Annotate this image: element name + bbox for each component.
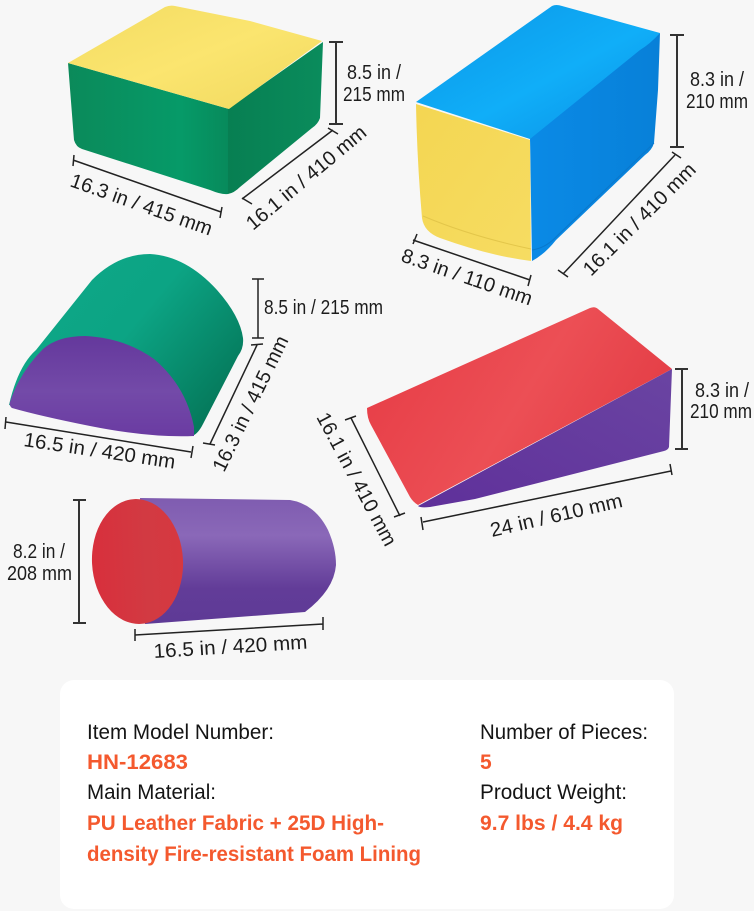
block: green sides and yellow top bbox=[68, 6, 323, 194]
dimension: 24 in / 610 mm: 24 in / 610 mm bbox=[488, 490, 625, 542]
product: purple cylinder with red end and dimensions bbox=[7, 497, 336, 663]
dimension: 16.1 in / 410 mm: 16.1 in / 410 mm bbox=[579, 159, 701, 281]
dimension: 16.3 in / 415 mm: 16.3 in / 415 mm bbox=[209, 333, 293, 475]
product: half-round green and purple bolster with dimensions bbox=[5, 254, 383, 475]
dimension: 16.5 in / 420 mm bbox=[135, 617, 323, 663]
spec: number of pieces: Number of Pieces: bbox=[480, 721, 648, 744]
dimension: 16.1 in / 410 mm: 16.1 in / 410 mm bbox=[312, 409, 400, 550]
spec: main material: Main Material: bbox=[87, 781, 216, 804]
dimension: 8.5 in / 215 mm: 215 mm bbox=[343, 84, 405, 106]
dimension: 8.5 in / 215 mm: 8.5 in / 215 mm bbox=[264, 297, 383, 319]
spec: main material: PU Leather Fabric + 25D High- bbox=[87, 812, 384, 835]
dimension: 8.2 in / 208 mm: 208 mm bbox=[7, 563, 72, 585]
product: blue and yellow rectangular block with dimensions bbox=[398, 5, 748, 310]
spec: item model number bbox=[87, 721, 274, 774]
dimension: 16.5 in / 420 mm bbox=[5, 417, 193, 474]
dimension: 8.3 in / 210 mm: 8.3 in / bbox=[695, 380, 749, 402]
dimension: 8.3 in / 110 mm: 8.3 in / 110 mm bbox=[398, 245, 535, 310]
dimension: 8.2 in / 208 mm: 8.2 in / bbox=[13, 541, 65, 563]
bolster: green curved body and purple end bbox=[9, 254, 243, 436]
product: square foam block with dimensions bbox=[67, 6, 405, 240]
block: blue sides and yellow end bbox=[416, 5, 660, 261]
dimension: 16.1 in / 410 mm: 16.1 in / 410 mm bbox=[242, 122, 371, 235]
dimension: 8.3 in / 210 mm: 8.3 in / bbox=[690, 69, 744, 91]
spec: number of pieces bbox=[480, 721, 648, 774]
spec: item model number: HN-12683 bbox=[87, 751, 188, 774]
spec: main material bbox=[87, 781, 421, 866]
dimension: 8.2 in / 208 mm bbox=[7, 500, 86, 623]
spec: product weight: 9.7 lbs / 4.4 kg bbox=[480, 812, 623, 835]
dimension: 8.5 in / 215 mm bbox=[252, 279, 383, 338]
product: red and purple wedge with dimensions bbox=[312, 307, 752, 550]
spec: item model number: Item Model Number: bbox=[87, 721, 274, 744]
dimension: 8.3 in / 210 mm bbox=[670, 35, 748, 147]
wedge: red slope and purple side bbox=[367, 307, 672, 507]
dimension: 16.5 in / 420 mm: 16.5 in / 420 mm bbox=[153, 632, 308, 663]
spec: main material: density Fire-resistant Foam Lining bbox=[87, 843, 421, 866]
spec: number of pieces: 5 bbox=[480, 751, 492, 774]
spec: product weight: Product Weight: bbox=[480, 781, 627, 804]
panel: product specifications bbox=[60, 680, 674, 909]
dimension: 8.5 in / 215 mm bbox=[329, 42, 405, 124]
dimension: 8.5 in / 215 mm: 8.5 in / bbox=[347, 62, 401, 84]
dimension: 16.3 in / 415 mm: 16.3 in / 415 mm bbox=[67, 170, 215, 240]
dimension: 16.5 in / 420 mm: 16.5 in / 420 mm bbox=[22, 429, 177, 474]
spec: product weight bbox=[480, 781, 627, 835]
dimension: 8.3 in / 210 mm bbox=[675, 369, 752, 449]
dimension: 24 in / 610 mm bbox=[421, 464, 672, 542]
cylinder: purple body and red end bbox=[89, 497, 336, 626]
